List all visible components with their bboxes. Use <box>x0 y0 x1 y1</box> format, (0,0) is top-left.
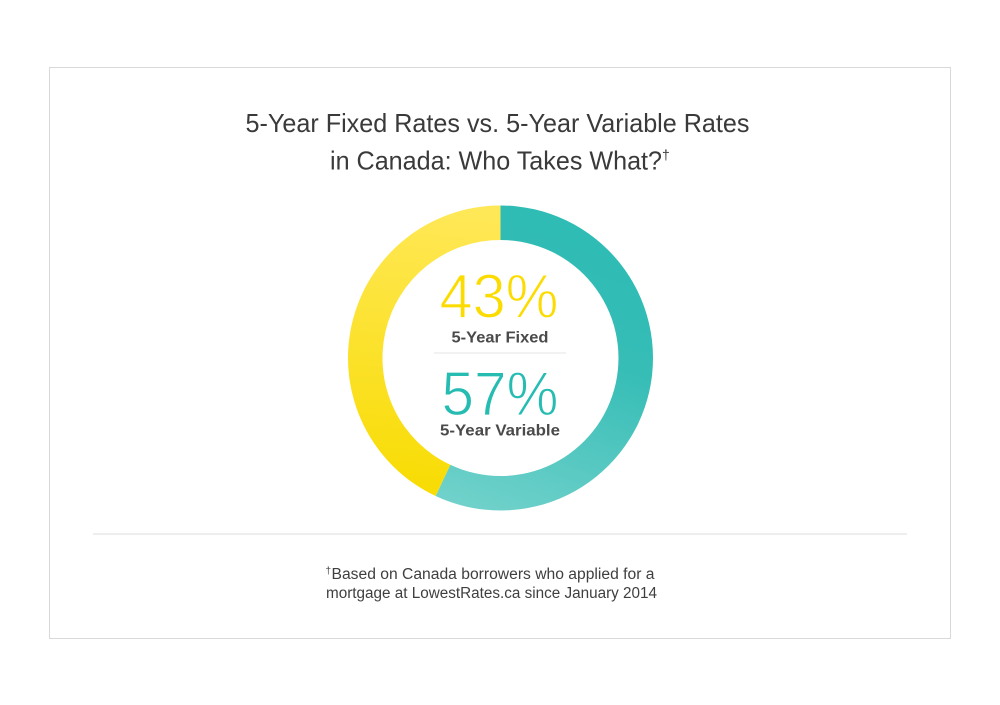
segment: 43% fixed <box>348 206 500 496</box>
donut chart <box>348 206 653 510</box>
footnote: † <box>326 566 331 577</box>
stat: 43% 5-Year Fixed: 5-Year Fixed <box>452 330 548 346</box>
panel: outer frame <box>50 68 950 638</box>
footnote: Based on Canada borrowers who applied for a <box>332 566 655 583</box>
footer divider <box>93 534 907 535</box>
title: 5-Year Fixed Rates vs. 5-Year Variable Rates <box>246 108 750 138</box>
stat: 57% 5-Year Variable: 57% <box>442 360 558 429</box>
title: † <box>662 146 670 162</box>
title <box>246 108 750 176</box>
segment: 57% variable <box>436 206 653 510</box>
footnote <box>326 566 657 602</box>
footnote: mortgage at LowestRates.ca since January 2014 <box>326 585 657 602</box>
stat: 43% 5-Year Fixed: 43% <box>440 262 558 332</box>
stat: 57% 5-Year Variable: 5-Year Variable <box>440 422 560 440</box>
title: in Canada: Who Takes What? <box>330 146 662 176</box>
center divider <box>434 352 566 354</box>
